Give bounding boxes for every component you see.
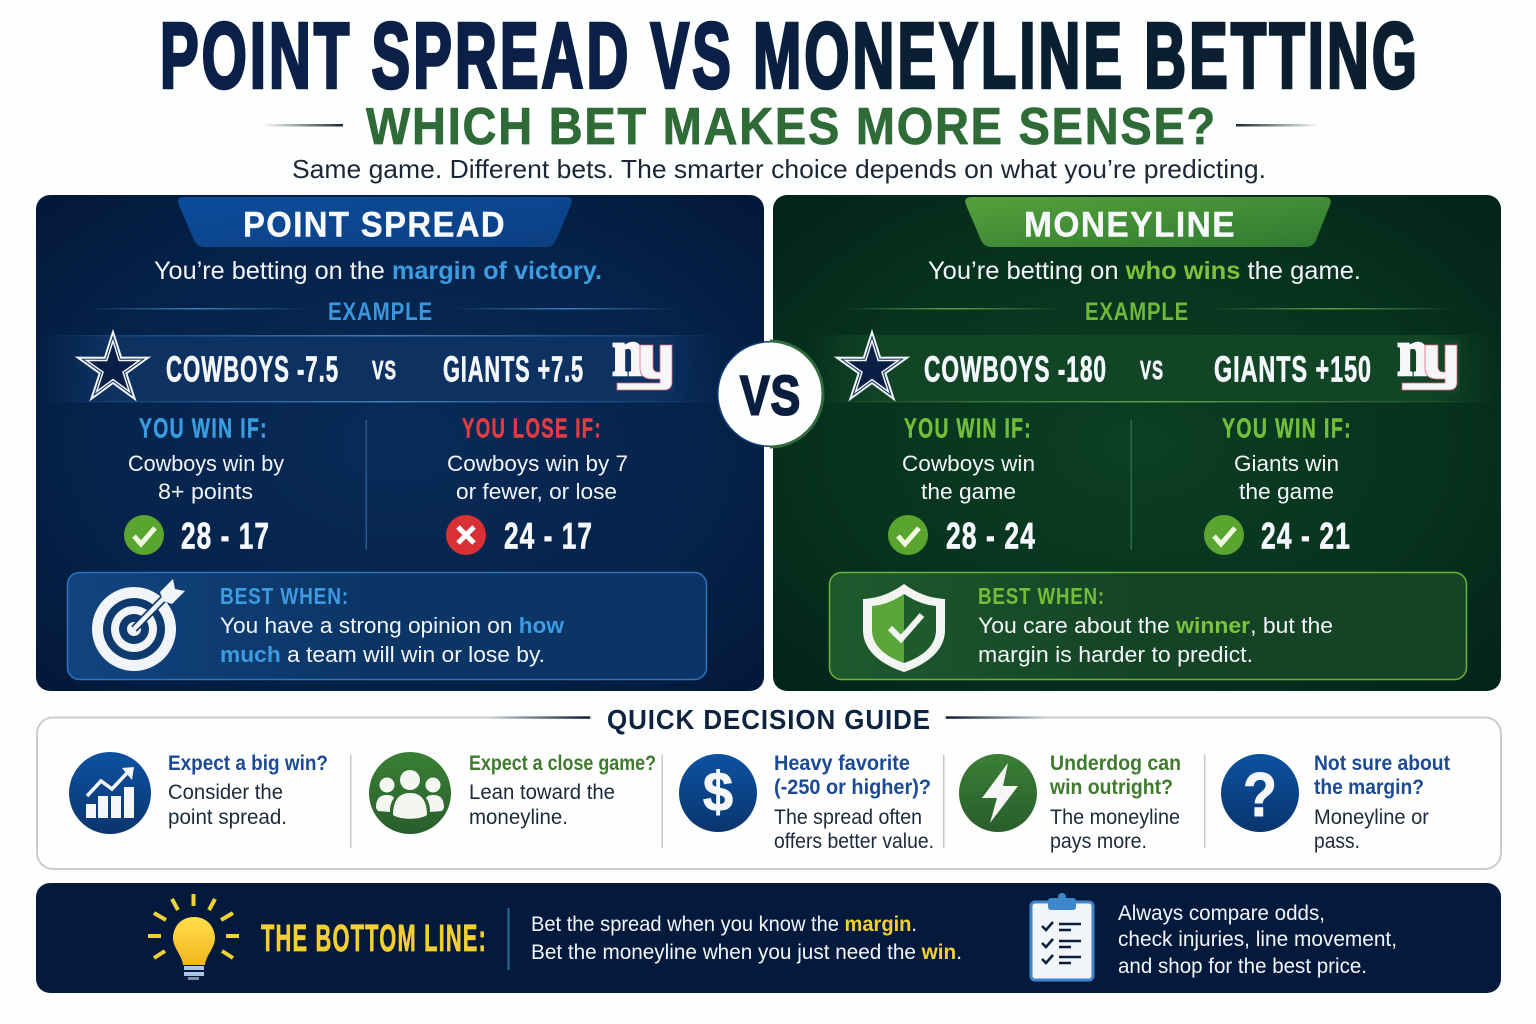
icon: cowboys star — [78, 332, 148, 399]
column: you win if, giants — [1204, 412, 1352, 556]
example divider: EXAMPLE — [1085, 298, 1189, 326]
item: unsure: the margin? — [1314, 776, 1424, 799]
panel background: green — [773, 195, 1501, 691]
summary text: Bet the spread when you know the margin. — [531, 913, 917, 936]
divider — [662, 755, 663, 848]
item: underdog — [959, 752, 1181, 853]
cowboys line: COWBOYS -7.5 — [166, 348, 339, 390]
icon: lightning bolt — [959, 754, 1037, 832]
item: underdog: win outright? — [1049, 776, 1173, 799]
callout: best when, spread: BEST WHEN: — [220, 583, 349, 609]
column divider — [1130, 420, 1132, 550]
item: unsure: pass. — [1314, 830, 1360, 853]
item: underdog: Underdog can — [1050, 752, 1181, 775]
icon: group of people — [369, 752, 451, 834]
heading tab: point spread: POINT SPREAD — [243, 206, 506, 244]
column: you lose if: or fewer, or lose — [456, 479, 617, 504]
divider — [1204, 755, 1206, 848]
giants line: GIANTS +7.5 — [443, 348, 584, 390]
callout: best when, moneyline — [830, 572, 1466, 680]
icon: giants logo: ny — [612, 314, 672, 390]
callout: best when, moneyline: BEST WHEN: — [978, 583, 1105, 609]
column: you win if: Cowboys win by — [128, 451, 284, 476]
bottom line heading: THE BOTTOM LINE: — [261, 918, 487, 960]
divider — [508, 908, 510, 970]
icon: clipboard checklist — [1031, 893, 1093, 980]
tips text — [1118, 902, 1397, 978]
heading tab: point spread — [178, 197, 572, 247]
callout: best when, spread: much a team will win or lose by. — [220, 642, 545, 667]
item: heavy favorite: (-250 or higher)? — [774, 776, 931, 799]
callout: best when, spread — [68, 572, 706, 680]
column: you lose if — [446, 412, 628, 556]
column: you win if, giants: the game — [1239, 479, 1334, 504]
column: you win if, cowboys: 28 - 24 — [946, 516, 1036, 556]
vs small: VS — [372, 355, 397, 385]
matchup band — [812, 314, 1495, 402]
heading tab: moneyline — [965, 197, 1331, 247]
item: heavy favorite: offers better value. — [774, 830, 934, 853]
column: you win if, giants: 24 - 21 — [1261, 516, 1351, 556]
icon: giants logo: ny — [1397, 314, 1457, 390]
subtitle with side rules: WHICH BET MAKES MORE SENSE? — [366, 98, 1217, 156]
example divider: EXAMPLE — [328, 298, 433, 326]
definition text: You’re betting on who wins the game. — [928, 257, 1361, 285]
summary text: Bet the moneyline when you just need the win. — [531, 941, 962, 964]
column: you win if: 8+ points — [158, 479, 253, 504]
icon: green check — [888, 515, 928, 555]
guide heading — [490, 704, 1046, 735]
panel: bottom line — [36, 883, 1501, 993]
banner background — [36, 883, 1501, 993]
column: you win if: 28 - 17 — [181, 516, 270, 556]
guide frame — [37, 718, 1501, 869]
icon: question mark — [1221, 754, 1299, 832]
icon: light bulb — [148, 894, 239, 980]
tips text: Always compare odds, — [1118, 902, 1325, 925]
guide heading: QUICK DECISION GUIDE — [607, 704, 931, 735]
divider — [943, 755, 944, 848]
item: big win: point spread. — [168, 806, 287, 829]
icon: shield with check — [863, 584, 945, 672]
callout: best when, moneyline: You care about the winner, but the — [978, 613, 1333, 638]
column divider — [366, 420, 367, 550]
column: you win if, cowboys: Cowboys win — [902, 451, 1035, 476]
item: big win: Expect a big win? — [168, 752, 328, 775]
definition text: You’re betting on the margin of victory. — [154, 257, 602, 285]
icon: target with arrow — [92, 579, 185, 671]
icon: cowboys star — [837, 332, 907, 399]
icon: green check — [124, 515, 164, 555]
panel: moneyline — [773, 195, 1501, 691]
item: unsure: Moneyline or — [1314, 806, 1429, 829]
item: close game: Lean toward the — [469, 781, 615, 804]
column: you win if, cowboys: YOU WIN IF: — [904, 412, 1032, 444]
icon: dollar sign — [679, 754, 757, 832]
callout: best when, spread: You have a strong opinion on how — [220, 613, 565, 638]
tips text: check injuries, line movement, — [1118, 928, 1397, 951]
item: heavy favorite — [679, 752, 934, 853]
item: underdog: pays more. — [1050, 830, 1147, 853]
tagline: Same game. Different bets. The smarter choice depends on what you’re predicting. — [292, 154, 1266, 184]
vs small: VS — [1140, 355, 1164, 385]
item: close game: moneyline. — [469, 806, 568, 829]
badge: vs circle: VS — [740, 364, 801, 426]
column: you win if, cowboys: the game — [921, 479, 1016, 504]
item: unsure: Not sure about — [1314, 752, 1450, 775]
callout: best when, moneyline: margin is harder to predict. — [978, 642, 1253, 667]
item: big win — [69, 752, 328, 834]
item: unsure — [1221, 752, 1450, 853]
item: underdog: The moneyline — [1050, 806, 1180, 829]
icon: question mark: ? — [1243, 761, 1277, 830]
divider — [350, 755, 352, 848]
item: close game — [369, 752, 656, 834]
item: big win: Consider the — [168, 781, 283, 804]
giants line: GIANTS +150 — [1214, 348, 1372, 390]
item: close game: Expect a close game? — [469, 752, 656, 775]
column: you win if: YOU WIN IF: — [139, 412, 268, 444]
icon: rising chart — [69, 752, 151, 834]
summary text — [531, 913, 962, 964]
panel background: blue — [36, 195, 764, 691]
matchup band — [42, 314, 720, 402]
column: you lose if: 24 - 17 — [504, 516, 593, 556]
tips text: and shop for the best price. — [1118, 955, 1367, 978]
column: you lose if: YOU LOSE IF: — [462, 412, 602, 444]
column: you win if, giants: YOU WIN IF: — [1222, 412, 1352, 444]
column: you lose if: Cowboys win by 7 — [447, 451, 628, 476]
icon: red x — [446, 515, 486, 555]
icon: dollar sign: $ — [703, 760, 733, 823]
item: heavy favorite: Heavy favorite — [774, 752, 910, 775]
badge: vs circle — [718, 341, 823, 447]
panel: quick decision guide — [37, 704, 1501, 869]
icon: green check — [1204, 515, 1244, 555]
item: heavy favorite: The spread often — [774, 806, 922, 829]
panel: point spread — [36, 195, 764, 691]
heading tab: moneyline: MONEYLINE — [1024, 206, 1236, 244]
column: you win if, giants: Giants win — [1234, 451, 1339, 476]
cowboys line: COWBOYS -180 — [924, 348, 1107, 390]
column: you win if — [124, 412, 284, 556]
column: you win if, cowboys — [888, 412, 1036, 556]
